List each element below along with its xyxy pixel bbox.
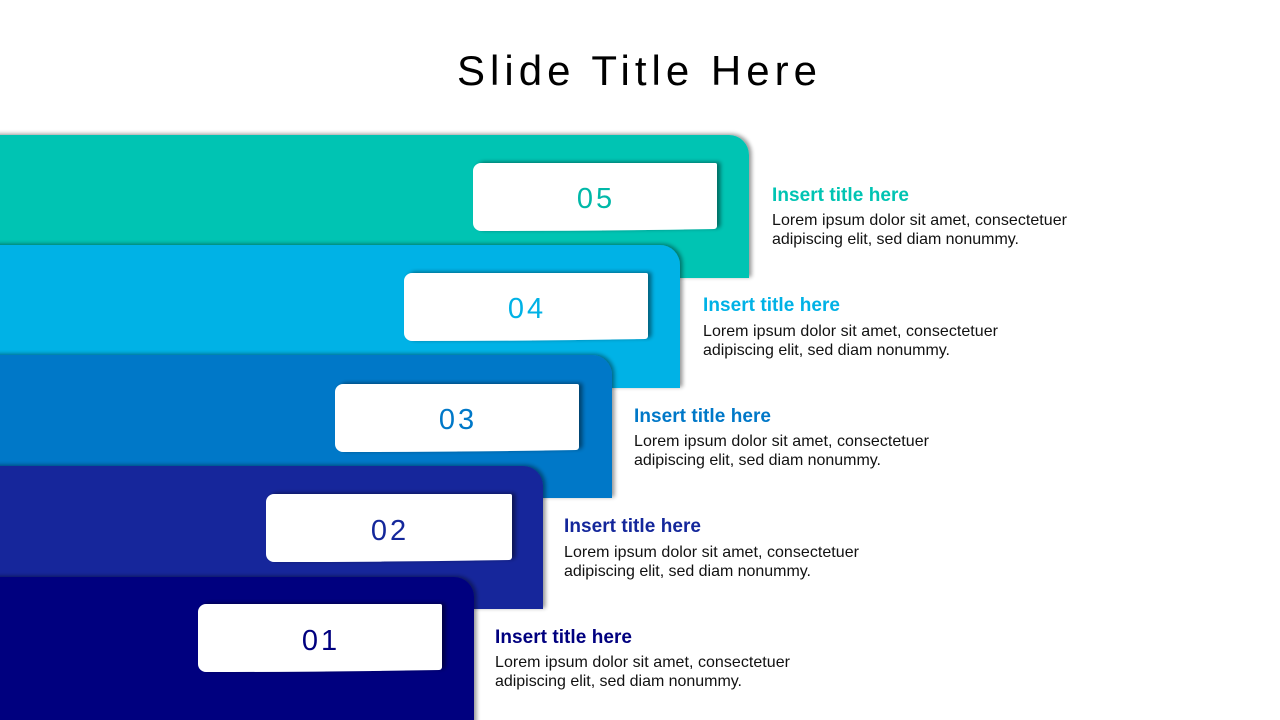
- text block: step 01: Lorem ipsum dolor sit amet, consectetuer: [495, 654, 791, 671]
- label: 03: [335, 384, 579, 452]
- label: 05: [473, 163, 717, 231]
- text block: step 03: Lorem ipsum dolor sit amet, consectetuer: [634, 433, 930, 450]
- text block: step 02: adipiscing elit, sed diam nonummy.: [564, 563, 811, 580]
- text block: step 03: [634, 406, 930, 469]
- text block: step 05: adipiscing elit, sed diam nonummy.: [772, 231, 1019, 248]
- label: 02: 02: [371, 515, 409, 547]
- label: 03: 03: [439, 404, 477, 436]
- panel: step 03: [0, 355, 612, 498]
- text block: step 05: Insert title here: [772, 185, 909, 206]
- label: 04: 04: [508, 293, 546, 325]
- label: 05: 05: [577, 183, 615, 215]
- text block: step 04: Lorem ipsum dolor sit amet, consectetuer: [703, 323, 999, 340]
- text block: step 01: [495, 627, 791, 690]
- panel: step 04: [0, 245, 680, 388]
- title: Slide Title Here: [457, 47, 820, 94]
- label: 04: [404, 273, 648, 341]
- label: 01: 01: [302, 625, 340, 657]
- label: 02: [266, 494, 512, 562]
- text block: step 01: Insert title here: [495, 627, 632, 648]
- text block: step 02: Insert title here: [564, 516, 701, 537]
- text block: step 03: adipiscing elit, sed diam nonummy.: [634, 452, 881, 469]
- label: 01: [198, 604, 442, 672]
- text block: step 04: Insert title here: [703, 295, 840, 316]
- panel: step 02: [0, 466, 543, 609]
- text block: step 02: Lorem ipsum dolor sit amet, consectetuer: [564, 544, 860, 561]
- text block: step 02: [564, 516, 860, 580]
- panel: step 01: [0, 577, 474, 720]
- text block: step 05: [772, 185, 1068, 248]
- text block: step 01: adipiscing elit, sed diam nonummy.: [495, 673, 742, 690]
- text block: step 03: Insert title here: [634, 406, 771, 427]
- text block: step 04: adipiscing elit, sed diam nonummy.: [703, 342, 950, 359]
- panel: step 05: [0, 135, 749, 278]
- text block: step 05: Lorem ipsum dolor sit amet, consectetuer: [772, 212, 1068, 229]
- text block: step 04: [703, 295, 999, 359]
